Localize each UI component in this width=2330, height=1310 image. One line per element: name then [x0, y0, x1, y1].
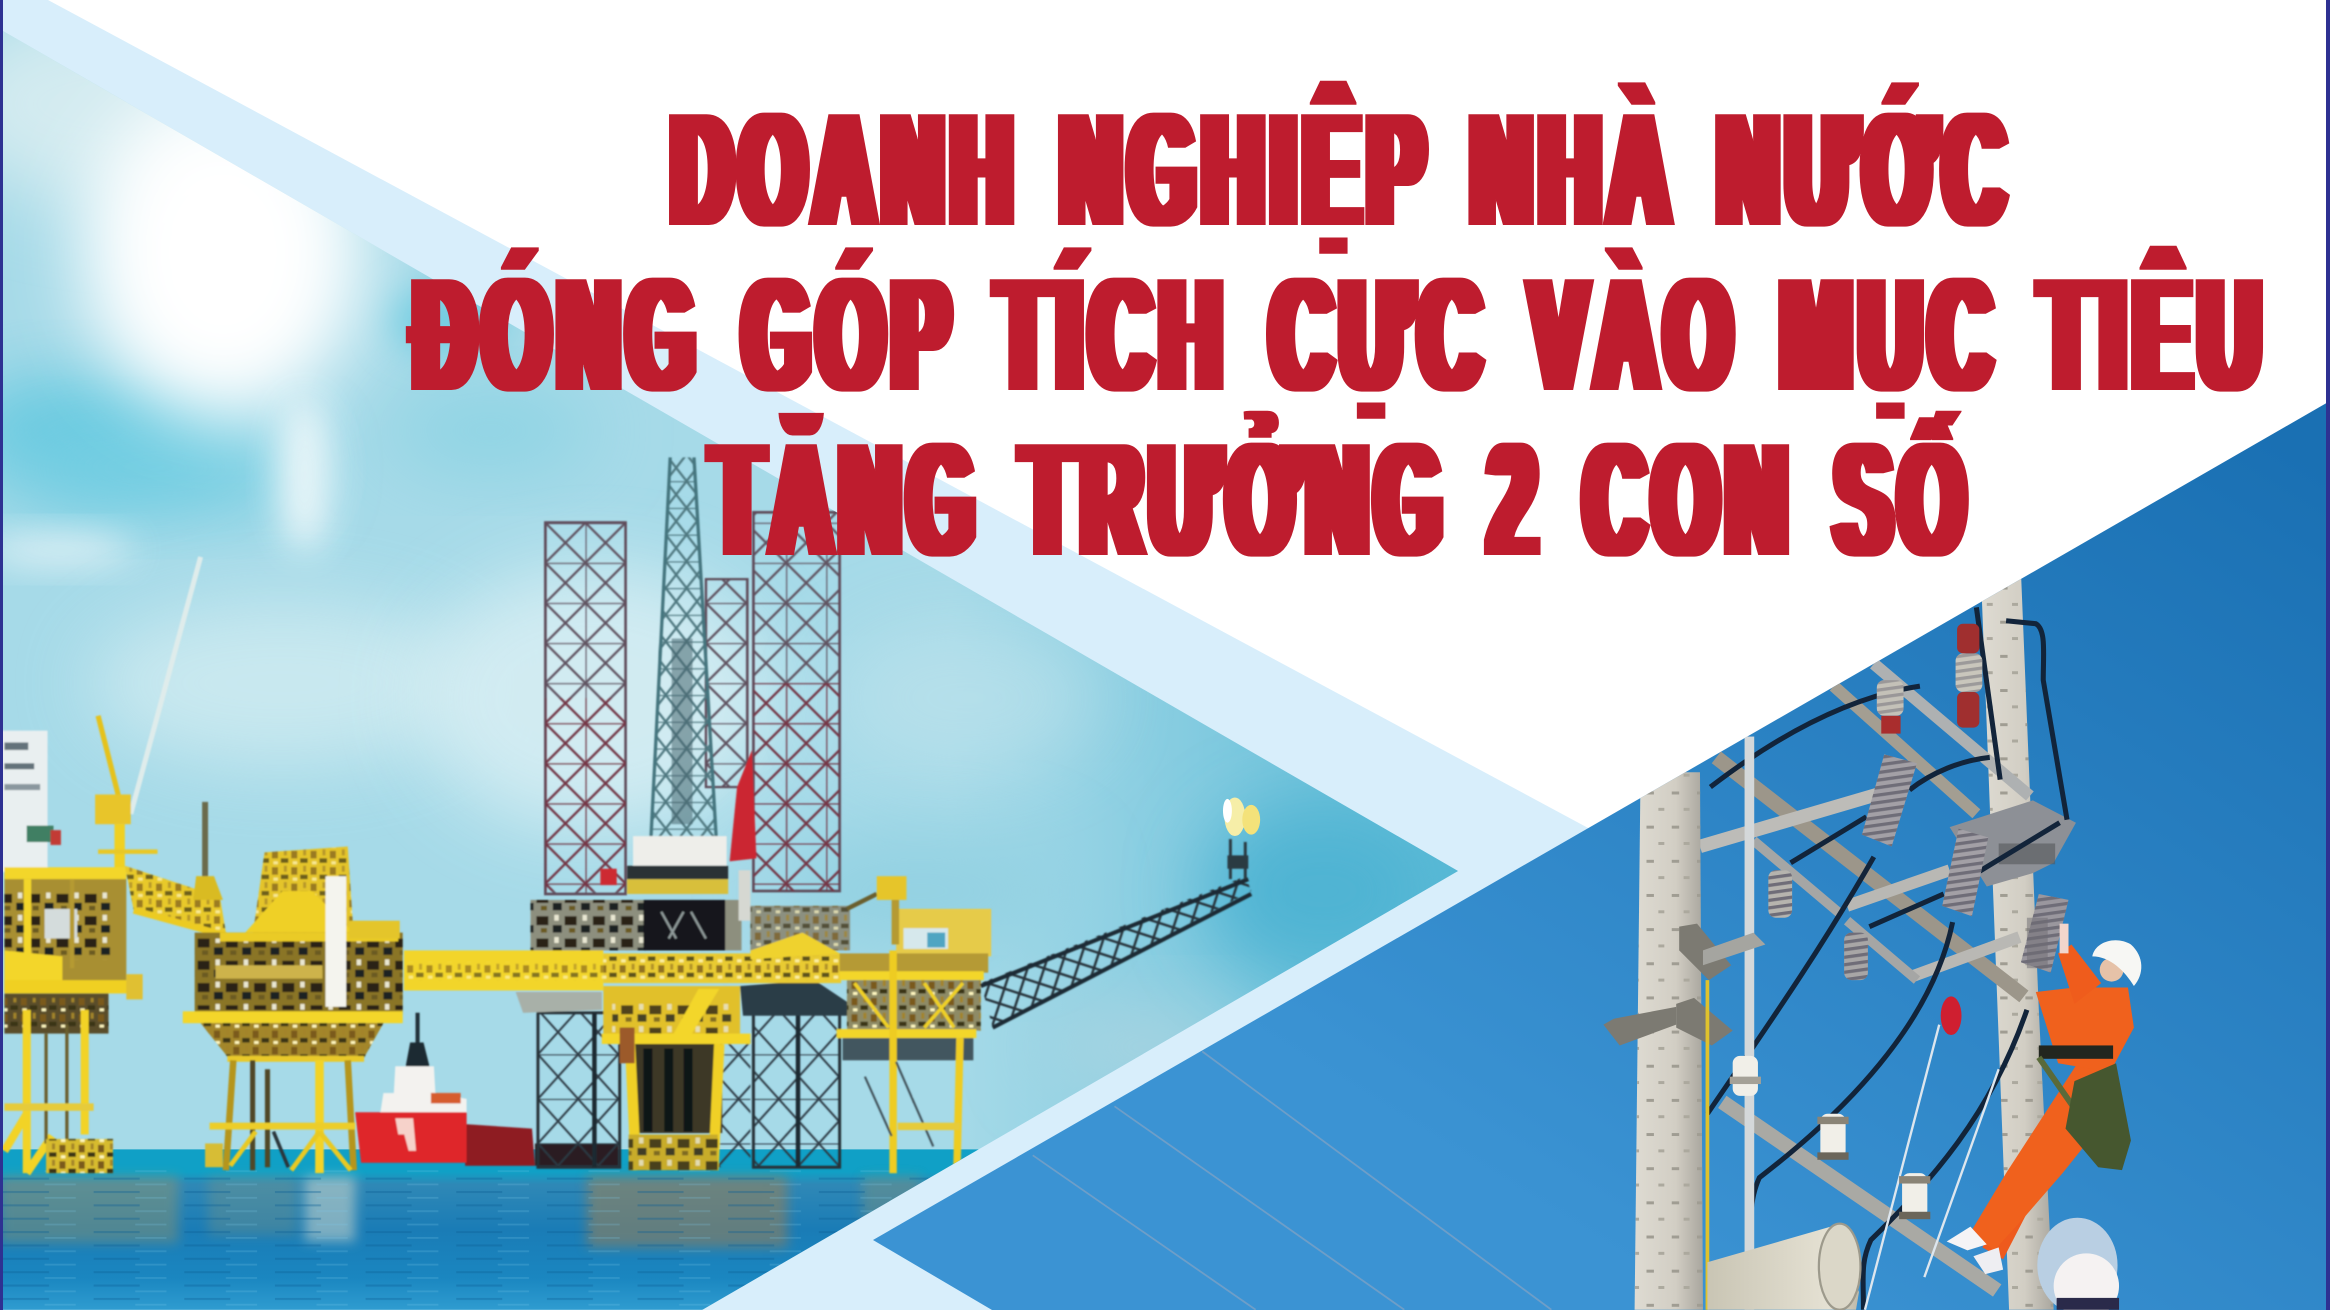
central yellow platform [602, 986, 750, 1170]
right page edge line [2326, 0, 2330, 1310]
distant power lines [1033, 1051, 1551, 1310]
photo: offshore oil rig [0, 0, 1486, 1310]
left white vessel superstructure [0, 731, 61, 872]
right production platform [837, 876, 991, 1173]
silver vertical pipe [1745, 737, 1754, 1310]
blue triangle background [873, 401, 2330, 1310]
title [414, 80, 2269, 590]
photo: electrical pole and worker [1033, 572, 2141, 1310]
long yellow connecting bridge [404, 933, 841, 990]
yellow wire on pole [1706, 980, 1709, 1310]
left concrete pole [1635, 772, 1703, 1310]
crane with boom [94, 556, 204, 868]
worker in orange uniform [1947, 918, 2141, 1274]
thin white safety ropes [1865, 1025, 1999, 1310]
jack-up rig towers [545, 457, 840, 894]
walkway bridge left [125, 802, 226, 936]
left page edge line [0, 0, 3, 1310]
sea with reflections [3, 1149, 979, 1310]
black cables [1707, 607, 2067, 1310]
lower cross arm with white insulators [1730, 1056, 1930, 1219]
flare flame [1223, 797, 1260, 836]
flare boom truss [981, 839, 1251, 1028]
transformer cylinder [1707, 1224, 1860, 1310]
rig hull deck [516, 866, 850, 1016]
gray ribbed insulators [1768, 624, 2069, 980]
pole brackets [1603, 924, 1765, 1045]
street lamp [2037, 1218, 2119, 1310]
red fall arrester [1941, 996, 1962, 1035]
middle production platform [183, 846, 403, 1173]
pale blue triangular band [0, 0, 1590, 1310]
supply ship [355, 1013, 618, 1166]
left production platform [4, 867, 143, 1173]
right concrete pole [1981, 572, 2054, 1310]
rig lower legs [538, 1013, 840, 1167]
cross arms [1700, 664, 2076, 1290]
sky and clouds [0, 0, 1486, 1310]
